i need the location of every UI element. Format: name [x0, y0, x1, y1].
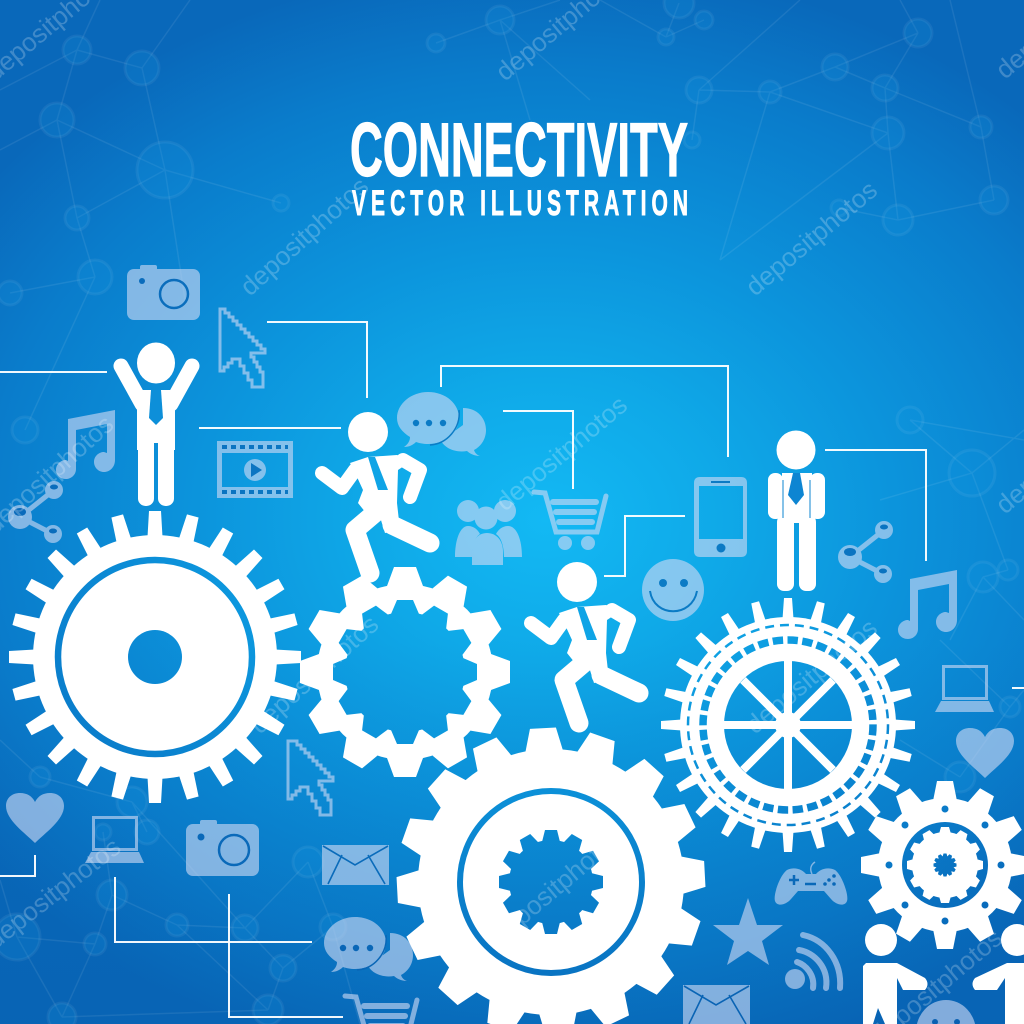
- gear 2 toothed hole: [300, 567, 510, 777]
- connector lines: [0, 322, 1024, 1017]
- watermark text: depositphotos: [234, 171, 374, 301]
- icon: share right: [838, 521, 893, 583]
- figure: businessman arms raised: [121, 342, 192, 506]
- icon: music note left: [56, 410, 115, 479]
- icon: smiley: [642, 559, 704, 621]
- watermark text: depositphotos: [244, 609, 384, 739]
- figures: two people shaking hands: [863, 924, 1024, 1024]
- icon: cart top: [534, 492, 606, 550]
- gear 3 big bottom centre: [396, 727, 706, 1024]
- icon: laptop left: [85, 816, 144, 863]
- icon: cursor bottom: [288, 741, 333, 815]
- icon: camera top: [127, 265, 200, 320]
- figure: running businessman lower: [531, 562, 639, 723]
- gear 4 spoked wheel: [661, 598, 915, 852]
- gear 5 small right: [861, 781, 1024, 949]
- icon: chat bubbles top: [397, 392, 486, 456]
- icon: cart bottom: [345, 996, 417, 1024]
- icon: music note right: [898, 570, 957, 639]
- icon: chat bubble bottom right: [916, 1000, 976, 1024]
- icon: heart right: [956, 728, 1014, 778]
- watermark text: depositphotos: [490, 390, 633, 517]
- icon: chat bubbles bottom: [324, 917, 413, 981]
- watermark text: depositphotos: [740, 613, 883, 740]
- icon: star: [713, 898, 783, 965]
- gear 1 large with ring: [9, 511, 301, 803]
- title: CONNECTIVITY: [350, 108, 688, 193]
- icon: wifi: [785, 935, 840, 989]
- icon: envelope right: [683, 985, 750, 1024]
- subtitle: VECTOR ILLUSTRATION: [352, 185, 688, 223]
- icon: group of people: [455, 500, 522, 565]
- watermark text: depositphotos: [740, 175, 883, 302]
- icon: envelope left: [322, 845, 389, 885]
- icon: share left: [8, 481, 63, 543]
- icon: video film: [217, 441, 293, 498]
- figure: standing businessman: [768, 430, 825, 591]
- icon: laptop right: [935, 665, 994, 712]
- figure: running businessman upper: [322, 412, 430, 573]
- icon: camera bottom: [186, 820, 259, 876]
- icon: cursor top: [220, 309, 265, 387]
- icon: tablet: [694, 477, 747, 557]
- watermark text: depositphotos: [485, 823, 628, 950]
- icon: heart left: [6, 793, 64, 843]
- icon: gamepad: [775, 862, 847, 905]
